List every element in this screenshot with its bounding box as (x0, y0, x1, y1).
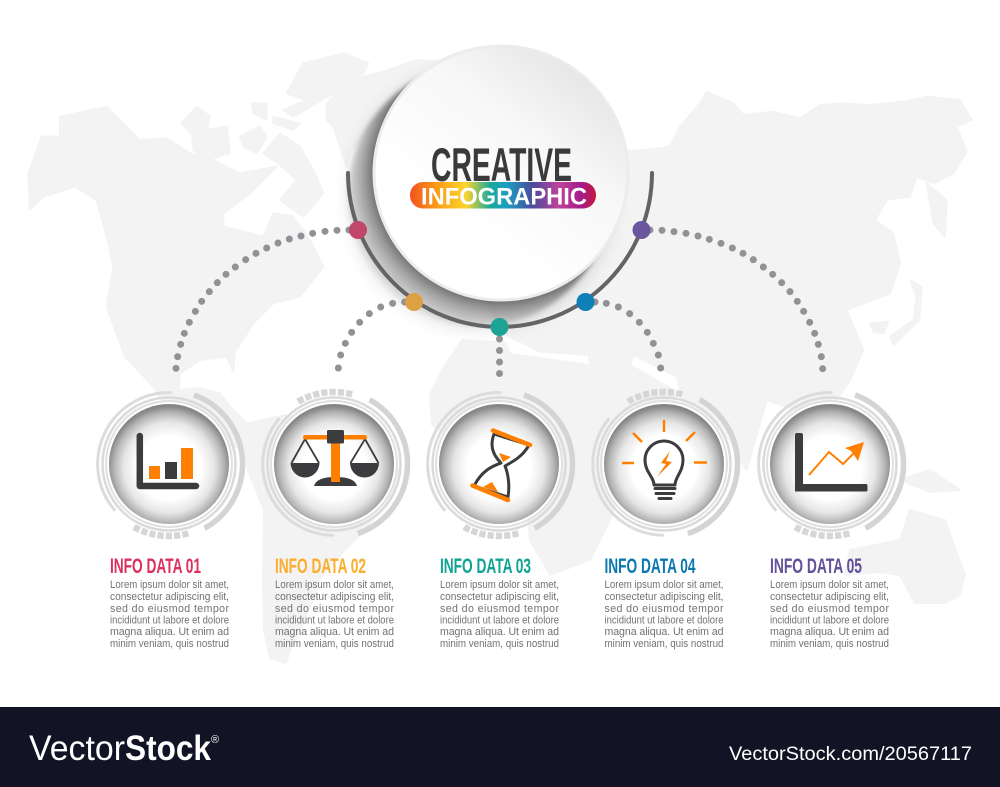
step 1 badge (98, 393, 243, 536)
footer logo: ® (211, 734, 219, 746)
icon: rising line chart (795, 433, 868, 492)
step 5 badge (759, 393, 904, 536)
info block 01: INFO DATA 01 (110, 555, 201, 578)
info block 05: magna aliqua. Ut enim ad (770, 626, 889, 638)
footer logo (29, 729, 219, 768)
info block 05: sed do eiusmod tempor (770, 603, 889, 615)
dotted connector: far right (646, 226, 826, 372)
info block 03: Lorem ipsum dolor sit amet, (440, 579, 559, 591)
world map background (28, 53, 972, 663)
info block 03: incididunt ut labore et dolore (440, 614, 559, 626)
info block 02: magna aliqua. Ut enim ad (275, 626, 394, 638)
node: purple (632, 221, 650, 239)
dotted connector: inner right (591, 298, 664, 371)
dotted connector: middle (496, 336, 503, 377)
info block 03: magna aliqua. Ut enim ad (440, 626, 559, 638)
dotted connector: far left (172, 226, 352, 372)
footer logo: Stock (125, 729, 211, 768)
info block 05: consectetur adipiscing elit, (770, 591, 889, 603)
footer bar (0, 707, 1000, 787)
info block 01: minim veniam, quis nostrud (110, 638, 229, 650)
info block 05: Lorem ipsum dolor sit amet, (770, 579, 889, 591)
info block 05: INFO DATA 05 (770, 555, 862, 578)
icon: balance scales (290, 430, 379, 486)
info block 01: consectetur adipiscing elit, (110, 591, 229, 603)
title: CREATIVE: CREATIVE (431, 138, 572, 191)
dotted connector: inner left (335, 298, 408, 371)
icon: light bulb (622, 420, 707, 498)
info block 02: consectetur adipiscing elit, (275, 591, 394, 603)
footer logo: Vector (29, 729, 125, 768)
node: pink (349, 221, 367, 239)
node: teal (490, 318, 508, 336)
info block 01: Lorem ipsum dolor sit amet, (110, 579, 229, 591)
info block 02: Lorem ipsum dolor sit amet, (275, 579, 394, 591)
node: blue (576, 293, 594, 311)
step 4 badge (593, 392, 737, 535)
info block 02: INFO DATA 02 (275, 555, 366, 578)
info block 02: minim veniam, quis nostrud (275, 638, 394, 650)
info block 03: sed do eiusmod tempor (440, 603, 559, 615)
info block 03: minim veniam, quis nostrud (440, 638, 559, 650)
info block 02: incididunt ut labore et dolore (275, 614, 394, 626)
node: amber (405, 293, 423, 311)
info block 04: minim veniam, quis nostrud (604, 638, 724, 650)
info block 01: incididunt ut labore et dolore (110, 614, 229, 626)
info block 04: sed do eiusmod tempor (604, 603, 724, 615)
info block 05: minim veniam, quis nostrud (770, 638, 889, 650)
footer image id: VectorStock.com/20567117 (729, 744, 972, 765)
info block 04 (604, 555, 724, 650)
info block 01: sed do eiusmod tempor (110, 603, 229, 615)
info block 03: INFO DATA 03 (440, 555, 531, 578)
main circle (374, 46, 628, 300)
step 2 badge (263, 392, 407, 535)
info block 04: incididunt ut labore et dolore (604, 614, 724, 626)
icon: hourglass (472, 430, 530, 500)
curved connector arc (348, 173, 652, 327)
info block 01 (110, 555, 229, 650)
shadow of main circle (348, 64, 612, 326)
info block 04: magna aliqua. Ut enim ad (604, 626, 724, 638)
info block 04: INFO DATA 04 (604, 555, 696, 578)
info block 02 (275, 555, 394, 650)
info block 01: magna aliqua. Ut enim ad (110, 626, 229, 638)
info block 05 (770, 555, 889, 650)
step 3 badge (428, 393, 573, 536)
title badge: INFOGRAPHIC: INFOGRAPHIC (421, 184, 587, 210)
info block 04: Lorem ipsum dolor sit amet, (604, 579, 724, 591)
info block 02: sed do eiusmod tempor (275, 603, 394, 615)
icon: bar chart (140, 436, 196, 486)
info block 03 (440, 555, 559, 650)
info block 05: incididunt ut labore et dolore (770, 614, 889, 626)
info block 04: consectetur adipiscing elit, (604, 591, 724, 603)
info block 03: consectetur adipiscing elit, (440, 591, 559, 603)
